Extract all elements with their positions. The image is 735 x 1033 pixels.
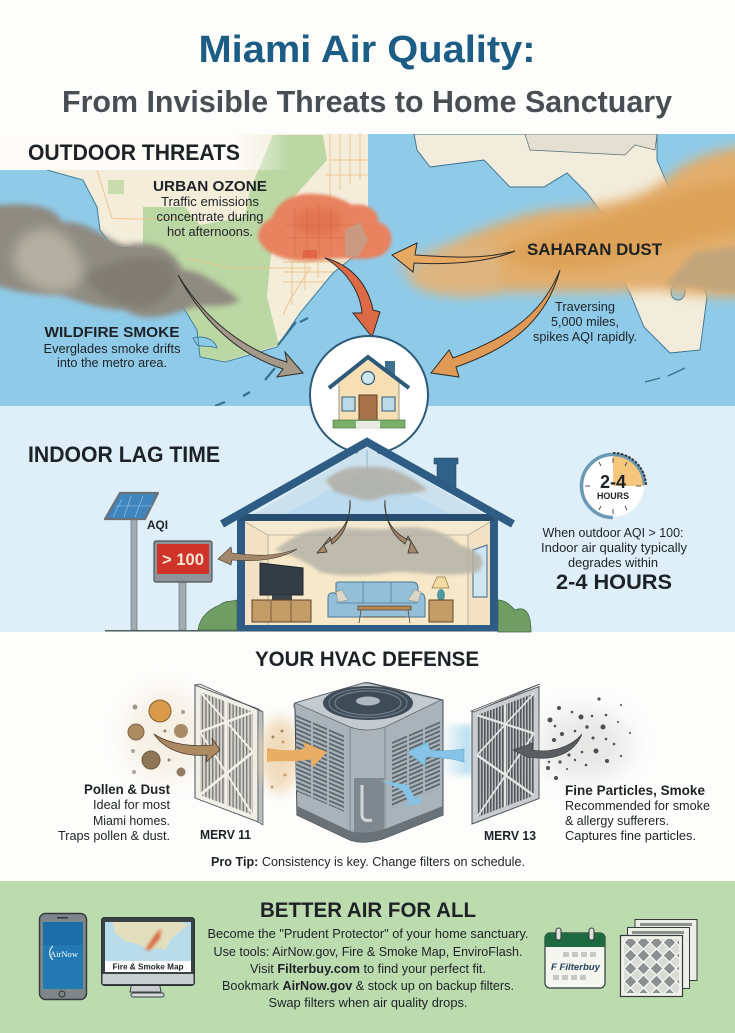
label: pollen and dust [58, 781, 170, 843]
label: fine particles and smoke: Fine Particles, Smoke [565, 782, 705, 798]
label: fine particles and smoke: & allergy sufferers. [565, 813, 669, 828]
arrow: filtered air into AC [267, 730, 327, 788]
walls and roof [237, 518, 245, 630]
label: urban ozone [154, 181, 266, 236]
filter: MERV 13 [471, 684, 540, 824]
attic [250, 447, 487, 516]
label: pollen and dust: Ideal for most [93, 797, 170, 812]
heading: outdoor threats: OUTDOOR THREATS [28, 140, 240, 165]
label: Saharan dust: Traversing [555, 299, 615, 314]
icon: solar AQI monitor: AQI [147, 518, 168, 532]
panel: HVAC defense [58, 648, 710, 869]
heading: better air for all: BETTER AIR FOR ALL [260, 899, 476, 922]
subtitle: From Invisible Threats to Home Sanctuary [62, 84, 673, 119]
callout: indoor lag text: Indoor air quality typically [541, 540, 687, 555]
callout: indoor lag text [541, 525, 687, 594]
body text: Visit Filterbuy.com to find your perfect fit. [250, 961, 486, 976]
label: MERV 11: MERV 11 [200, 827, 251, 842]
body text: Bookmark AirNow.gov & stock up on backup filters. [222, 978, 514, 993]
glow: filter to AC [260, 717, 300, 793]
particles: pollen and dust [125, 690, 205, 780]
label: fine particles and smoke: Recommended for smoke [565, 798, 710, 813]
body text: Swap filters when air quality drops. [268, 995, 468, 1010]
arrow: Saharan dust to home [431, 270, 560, 377]
map: south Florida land [0, 134, 368, 362]
label: fine particles and smoke: Captures fine particles. [565, 828, 696, 843]
arrow: indoor smoke to AQI sign [218, 547, 297, 565]
arrow: smoke into filter [513, 734, 582, 758]
coffee table [358, 606, 411, 623]
heading: indoor lag time: INDOOR LAG TIME [28, 442, 220, 467]
map: northern Florida [414, 134, 707, 353]
label: urban ozone: Traffic emissions [161, 194, 259, 209]
arrow: attic smoke down right [385, 500, 418, 553]
interior [239, 518, 497, 630]
filter: MERV 11 [195, 684, 263, 825]
label: urban ozone: concentrate during [156, 209, 264, 224]
icon: filterbuy calendar [545, 928, 605, 988]
attic smoke cloud [325, 467, 428, 500]
icon: filterbuy calendar: F Filterbuy [551, 962, 601, 972]
pro tip: Pro Tip: Consistency is key. Change filters on schedule. [211, 855, 525, 869]
label: urban ozone: URBAN OZONE [153, 178, 267, 195]
label: pollen and dust: Traps pollen & dust. [58, 828, 170, 843]
icon: stack of filters [620, 920, 697, 996]
icon: clock 2-4 hours [582, 453, 646, 518]
cloud: wildfire smoke [0, 204, 240, 317]
label: Saharan dust [527, 241, 662, 344]
lamp and side table [432, 577, 449, 588]
particles: fine particles and smoke [540, 697, 631, 780]
band behind heading [0, 134, 290, 170]
label: wildfire smoke [44, 327, 180, 367]
arrow: pollen into filter [154, 734, 220, 762]
label: MERV 13: MERV 13 [484, 828, 536, 843]
map water [0, 134, 735, 406]
arrow: attic smoke down left [317, 500, 350, 553]
panel: outdoor threats map [0, 134, 735, 406]
cloud: urban ozone [258, 194, 391, 261]
icon: AQI sign greater than 100: > 100 [162, 550, 204, 569]
heading: your HVAC defense: YOUR HVAC DEFENSE [255, 648, 479, 671]
footer background [0, 881, 735, 1033]
label: fine particles and smoke [565, 782, 710, 843]
arrow: Saharan dust to Miami [392, 243, 515, 272]
callout: indoor lag text: When outdoor AQI > 100: [542, 525, 684, 540]
icon: monitor fire and smoke map [102, 918, 194, 997]
label: wildfire smoke: WILDFIRE SMOKE [44, 324, 180, 341]
label: pollen and dust: Pollen & Dust [84, 781, 170, 797]
panel: indoor lag time [0, 336, 735, 632]
body text: Become the "Prudent Protector" of your home sanctuary. [208, 926, 528, 941]
TV and cabinet [260, 563, 303, 595]
arrow: cool air out of AC [380, 780, 422, 806]
label: Saharan dust: SAHARAN DUST [527, 241, 662, 259]
icon: monitor fire and smoke map: Fire & Smoke Map [112, 962, 184, 972]
panel: better air for all [0, 881, 735, 1033]
callout: indoor lag text: 2-4 HOURS [556, 571, 672, 594]
body text [208, 926, 528, 1010]
label: wildfire smoke: Everglades smoke drifts [44, 341, 181, 356]
label: urban ozone: hot afternoons. [167, 224, 253, 239]
label: Saharan dust: 5,000 miles, [551, 314, 619, 329]
window [473, 545, 487, 597]
indoor smoke cloud [275, 527, 483, 575]
callout: indoor lag text: degrades within [568, 555, 658, 570]
arrow: wildfire smoke to home [178, 275, 303, 377]
body text: Use tools: AirNow.gov, Fire & Smoke Map, EnviroFlash. [214, 944, 522, 959]
AC condenser unit [294, 683, 443, 842]
map: road network [97, 134, 368, 315]
label: Saharan dust: spikes AQI rapidly. [533, 329, 637, 344]
sofa [328, 582, 425, 617]
icon: solar AQI monitor [105, 493, 168, 630]
label: pollen and dust: Miami homes. [93, 813, 170, 828]
icon: clock 2-4 hours: HOURS [597, 491, 629, 501]
map: coastline [47, 170, 368, 362]
icon: phone AirNow app [40, 914, 86, 1000]
map: everglades green [143, 135, 327, 361]
label: wildfire smoke: into the metro area. [57, 355, 167, 370]
map: Florida Keys [215, 318, 308, 406]
airflow: cold air into AC [407, 725, 472, 775]
title: Miami Air Quality: [198, 29, 536, 71]
icon: phone AirNow app: AirNow [50, 949, 79, 959]
chimney [434, 458, 458, 492]
arrow: ozone to home [325, 258, 380, 337]
icon: clock 2-4 hours: 2-4 [600, 472, 626, 492]
cloud: Saharan dust plume [395, 145, 735, 298]
indoor background [0, 406, 735, 632]
big house cross-section [218, 442, 513, 631]
small house medallion [310, 336, 428, 454]
bushes [198, 600, 531, 632]
ground line [105, 630, 530, 632]
icon: AQI sign greater than 100 [154, 541, 212, 630]
